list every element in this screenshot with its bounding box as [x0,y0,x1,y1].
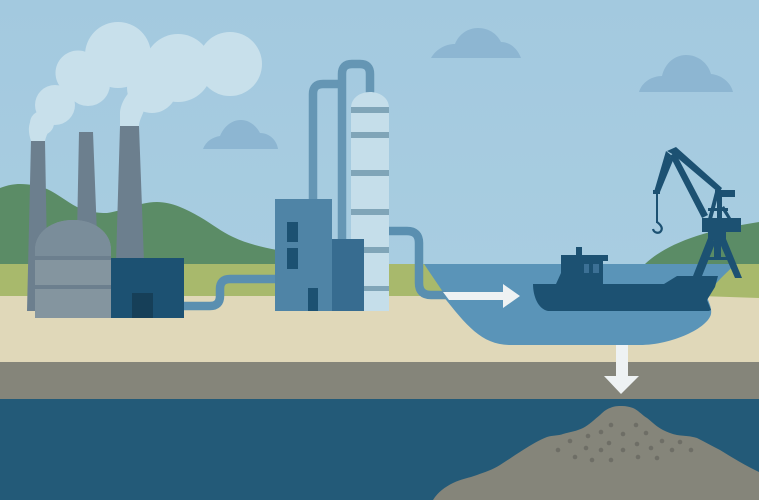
crane [653,147,742,278]
smoke plume [29,22,262,141]
hills: right [645,222,759,264]
olive bank: left of water [424,264,443,296]
olive land band [0,264,759,298]
storage dots [556,423,693,462]
factory building [111,258,184,318]
mound: storage formation [433,406,759,500]
sand ground [0,296,759,362]
pipe: column to water [389,231,446,295]
chimney: right [116,126,144,262]
refinery building [275,199,364,311]
arrow: right into water [443,284,520,308]
distillation column [351,92,389,311]
grey sediment layer [0,362,759,400]
pipe: factory to refinery [184,279,276,306]
deep navy layer [0,399,759,500]
water basin [424,264,735,345]
cloud: top right [639,55,733,92]
dome tank [35,220,111,318]
ship [533,247,718,311]
ship cabin windows [584,264,589,273]
cloud: top centre [431,28,521,58]
chimney: middle [77,132,97,235]
factory door [132,293,153,318]
cloud: small left [203,120,278,149]
olive bank: right [700,264,759,298]
chimney: left [27,141,48,311]
arrow: down to storage [604,345,639,394]
hills: left [0,184,300,264]
refinery pipes [313,64,370,240]
refinery door [308,288,318,311]
sky [0,0,759,270]
refinery windows [287,222,298,242]
